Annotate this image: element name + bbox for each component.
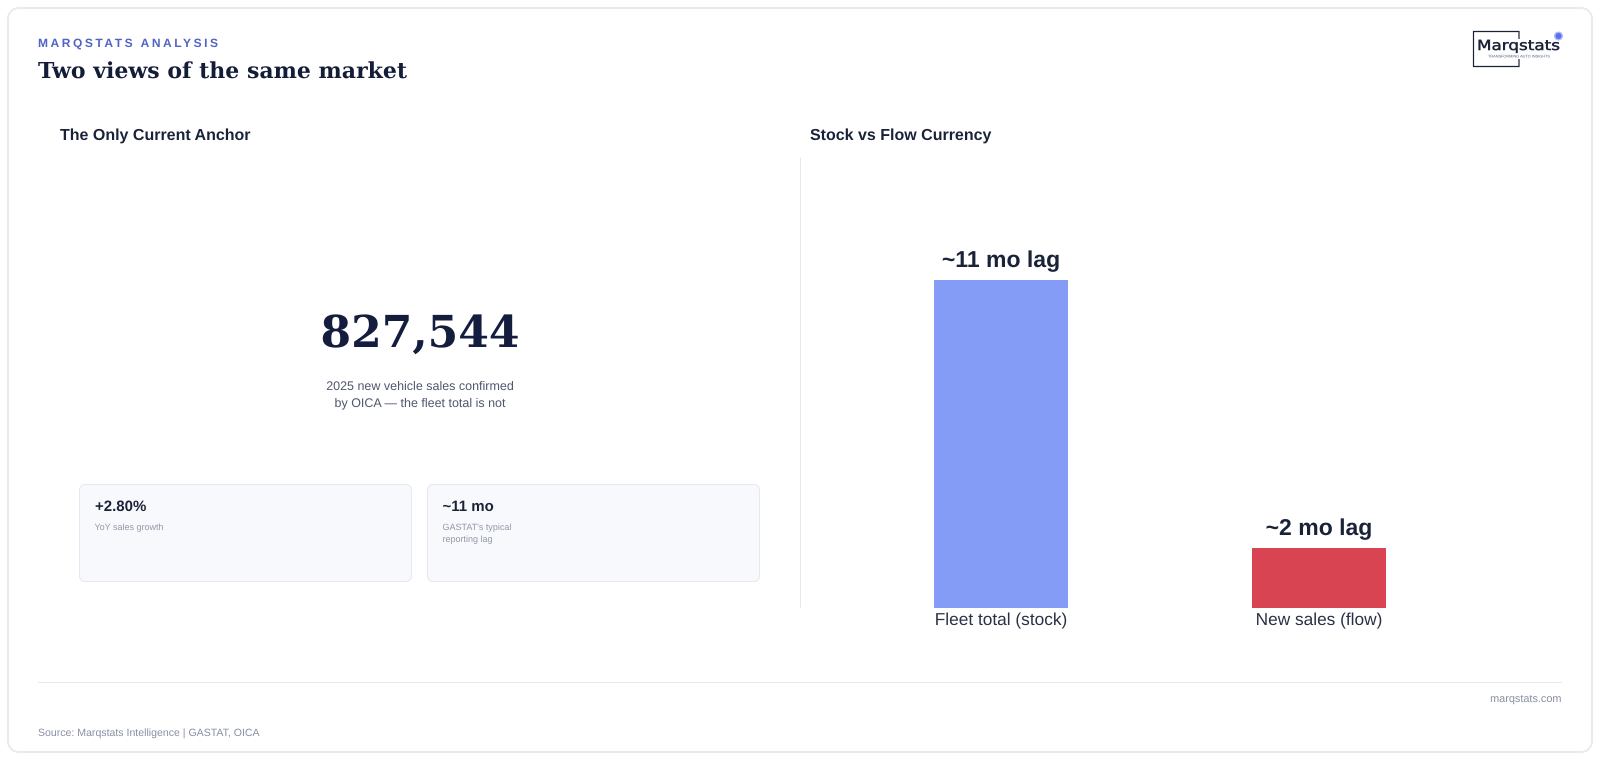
panel divider — [800, 158, 801, 608]
source: Source: Marqstats Intelligence | GASTAT, OICA — [38, 727, 260, 739]
bar value: fleet: ~11 mo lag — [942, 246, 1060, 272]
stat label: GASTAT's typical — [442, 522, 511, 532]
big number caption: by OICA — the fleet total is not — [335, 396, 505, 410]
bar: fleet total — [934, 280, 1068, 608]
logo frame — [1474, 32, 1519, 66]
bar label: fleet: Fleet total (stock) — [935, 609, 1067, 629]
eyebrow: MARQSTATS ANALYSIS — [38, 36, 221, 50]
stat value: +2.80% — [95, 498, 146, 515]
logo wordmark: Marqstats — [1477, 38, 1560, 54]
stat card: reporting lag — [427, 484, 760, 582]
title: Two views of the same market — [38, 58, 407, 84]
stat label: reporting lag — [442, 534, 493, 544]
footer site: marqstats.com — [1490, 692, 1562, 704]
bar value: new sales: ~2 mo lag — [1266, 514, 1372, 540]
logo tagline: TRANSFORMING AUTO INSIGHTS — [1488, 54, 1550, 58]
stat label: YoY sales growth — [94, 522, 164, 532]
big number caption: 2025 new vehicle sales confirmed — [326, 379, 514, 393]
logo dot — [1554, 32, 1563, 40]
big number caption — [326, 379, 514, 410]
stat card: sales growth — [79, 484, 412, 582]
footer rule — [38, 682, 1562, 683]
right panel heading: Stock vs Flow Currency — [810, 127, 991, 144]
bar chart — [934, 246, 1386, 629]
bar label: new sales: New sales (flow) — [1256, 609, 1382, 629]
stat value: ~11 mo — [442, 498, 494, 515]
big number: 827,544 — [320, 307, 520, 358]
logo — [1472, 30, 1563, 68]
bar: new sales — [1252, 548, 1386, 608]
left panel heading: The Only Current Anchor — [60, 127, 251, 144]
stat label — [442, 522, 511, 544]
